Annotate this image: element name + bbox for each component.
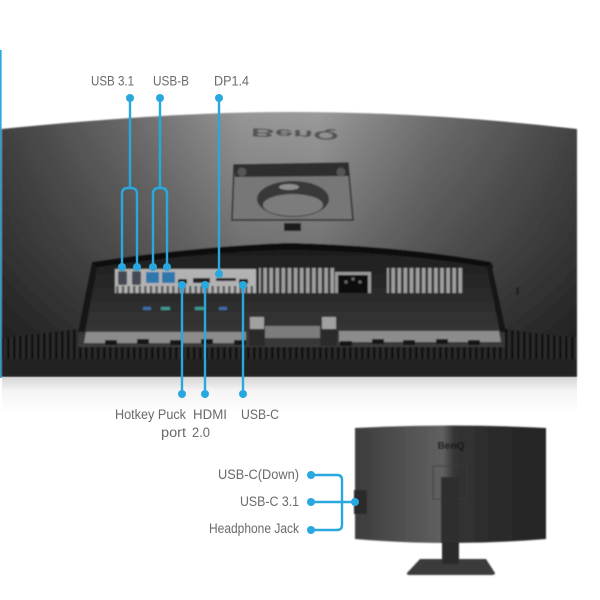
left edge line (0, 50, 2, 378)
side port labels: USB-C(Down) (218, 467, 299, 482)
callout: Hotkey Puck port (178, 281, 186, 398)
side port labels: USB-C 3.1 (240, 494, 299, 509)
left side vent (2, 329, 78, 358)
stand neck (441, 477, 459, 543)
right side vent (505, 329, 577, 358)
top port labels: USB-B (153, 74, 189, 88)
side buttons (516, 287, 519, 295)
stand base (407, 559, 495, 575)
small monitor shell (355, 426, 546, 543)
side port labels: Headphone Jack (209, 521, 299, 536)
bottom port labels: 2.0 (192, 425, 210, 440)
top port labels: USB 3.1 (91, 74, 134, 88)
side port labels (209, 467, 299, 536)
small monitor rear view (354, 426, 546, 575)
light floor strip (84, 326, 501, 343)
callout: DP1.4 (215, 94, 223, 278)
bottom dark band (2, 359, 577, 377)
bottom port labels (115, 407, 279, 440)
bottom port labels: HDMI (193, 407, 227, 422)
port panel (115, 269, 256, 293)
port cavity (78, 243, 506, 347)
power socket (335, 272, 371, 293)
port indicator marks (143, 307, 227, 310)
side port bump (354, 490, 367, 514)
small BenQ logo: BenQ (438, 441, 465, 452)
callout: USB 3.1 (118, 94, 141, 271)
stand neck lower (442, 540, 459, 564)
bottom port labels: port (161, 425, 186, 440)
bottom port labels: Hotkey Puck (115, 407, 186, 422)
callout: HDMI 2.0 (201, 281, 209, 398)
VESA mount recess (232, 163, 353, 231)
top port labels (91, 74, 249, 88)
floor reflection (2, 378, 577, 414)
monitor back shell (2, 112, 577, 377)
callout: USB-C (239, 281, 247, 398)
vent grille left (259, 268, 335, 293)
vent grille right (387, 268, 463, 293)
bottom vent strip (2, 347, 577, 359)
callout: side ports bracket (307, 471, 359, 534)
bottom port labels: USB-C (241, 407, 279, 422)
callout: USB-B (149, 94, 171, 271)
BenQ logo: BenQ (251, 125, 339, 143)
cable clips (250, 317, 264, 330)
mount plate outline (433, 466, 467, 499)
main monitor rear view (2, 112, 577, 377)
top port labels: DP1.4 (214, 74, 249, 88)
